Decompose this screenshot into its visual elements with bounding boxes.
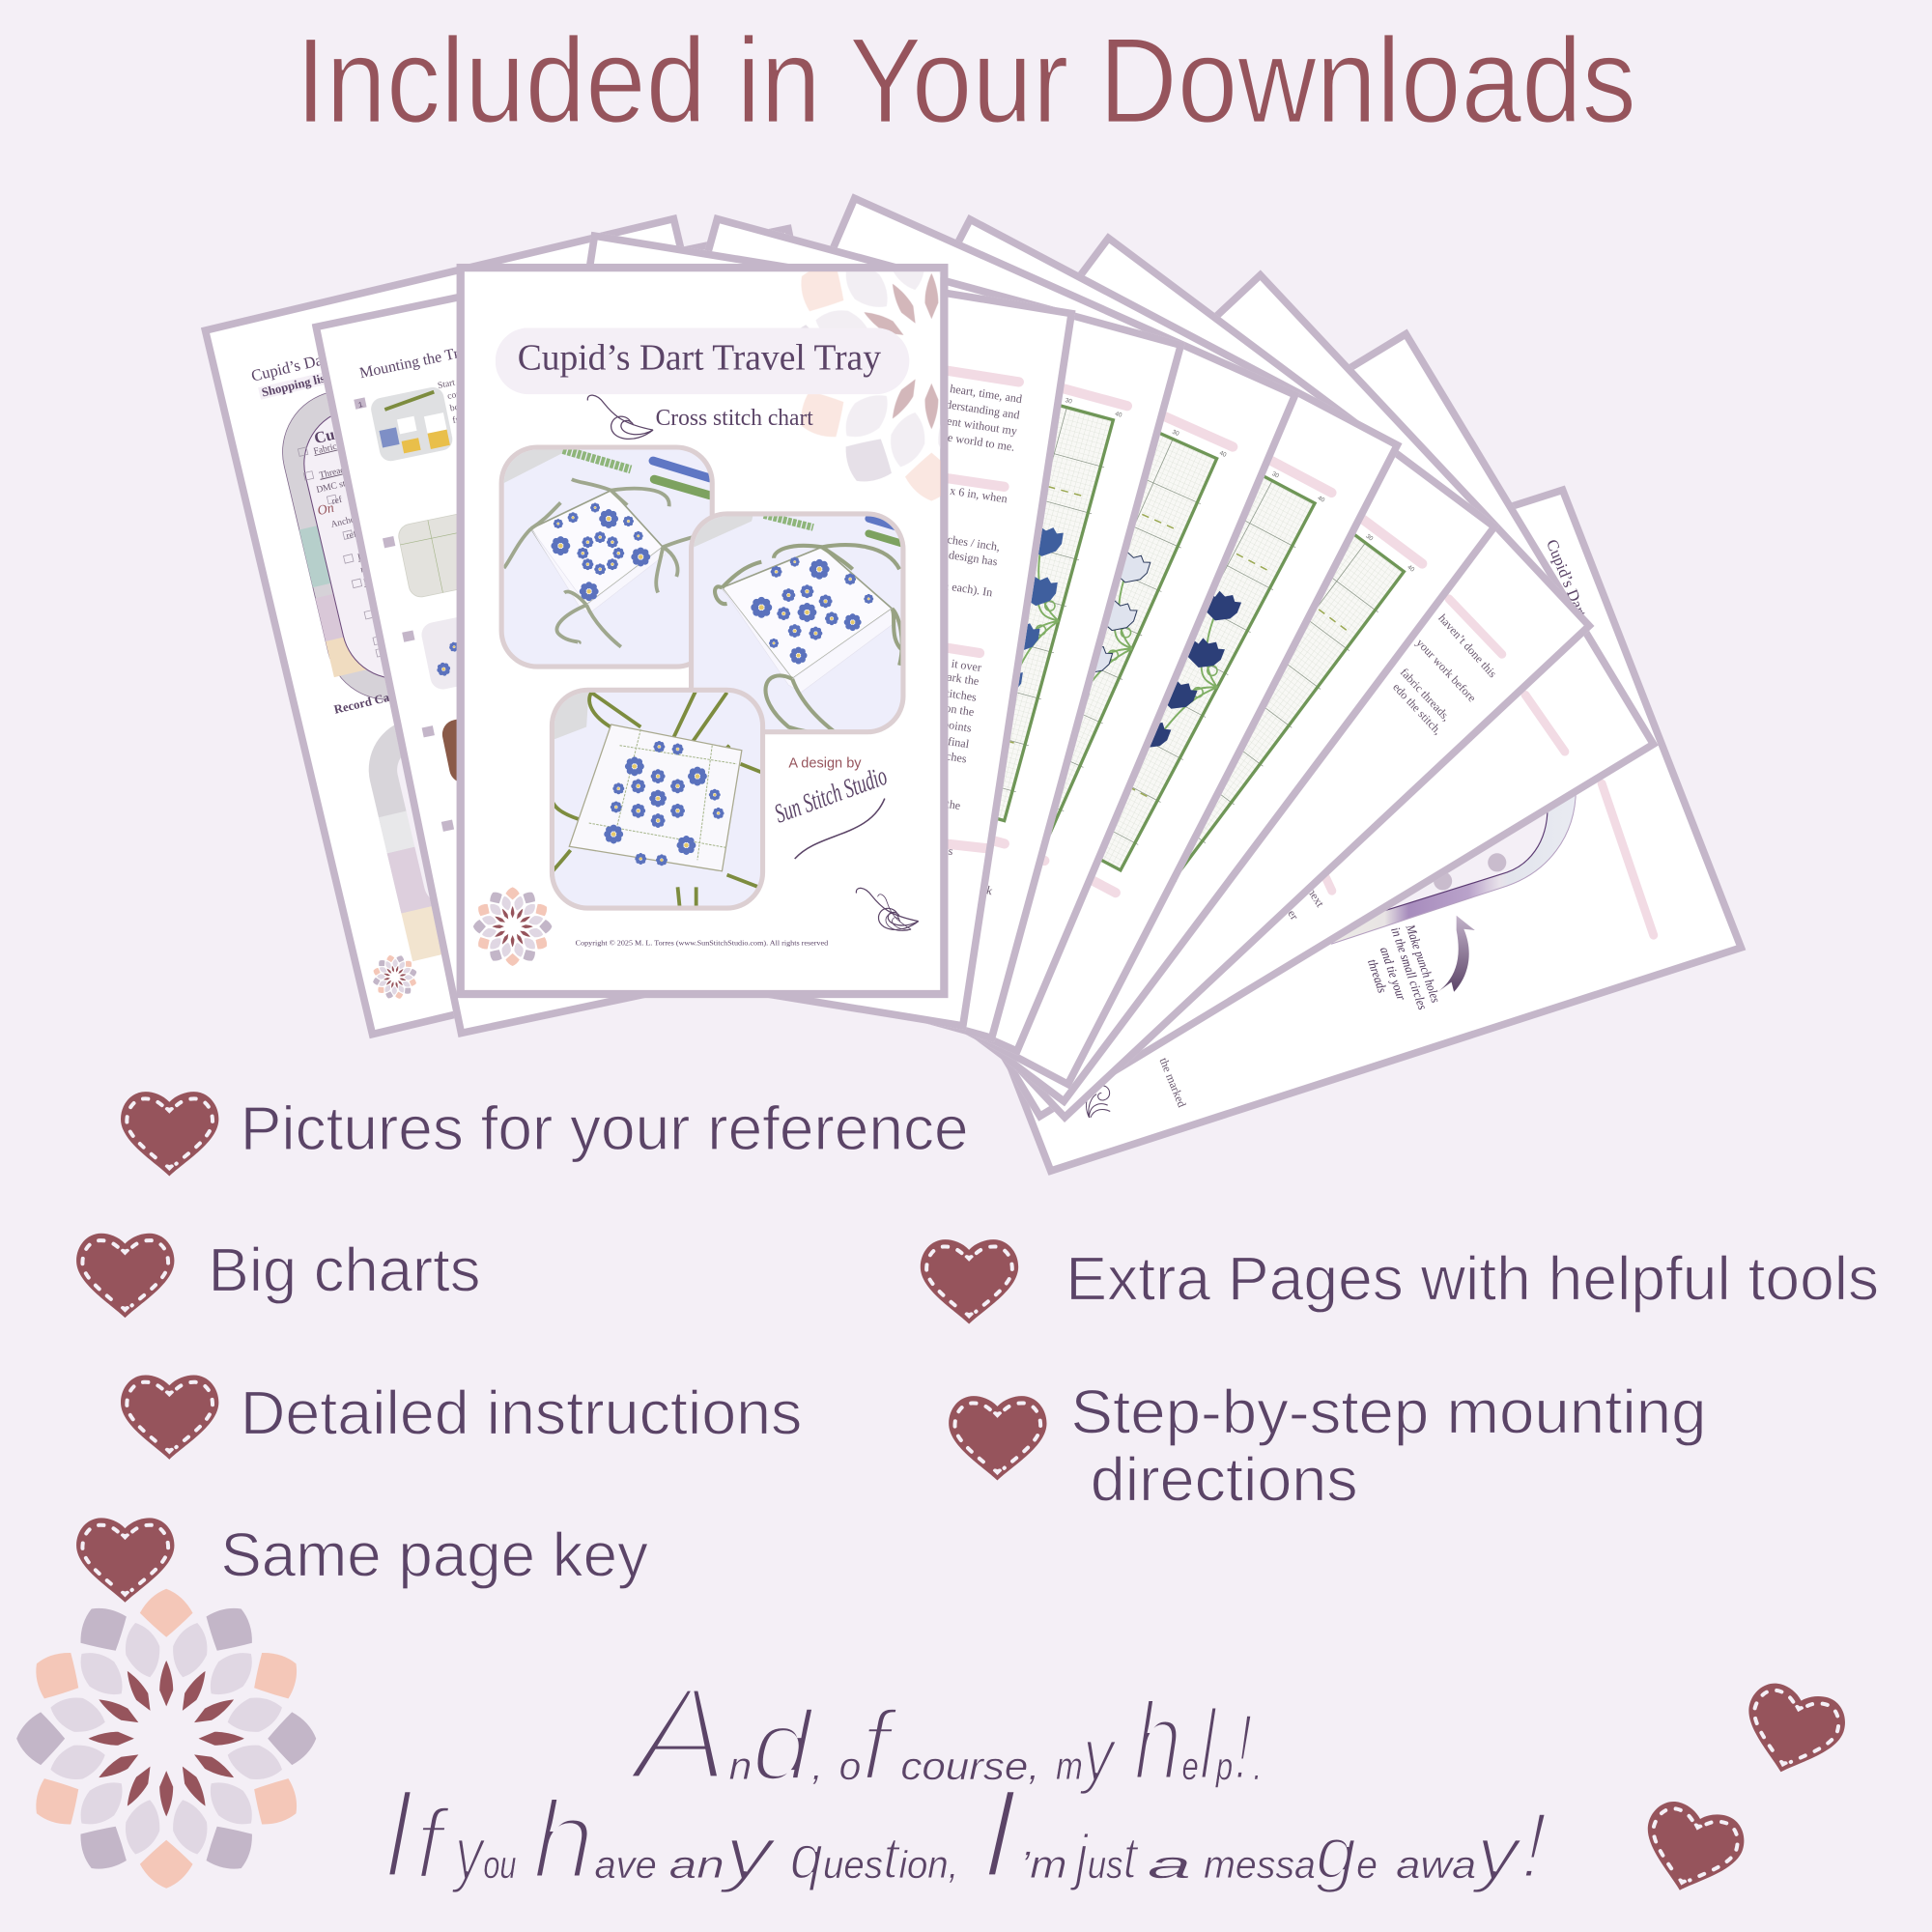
page: back page with punch holes template: Cupid’s Dart: [1543, 537, 1591, 620]
page: mounting the tray: need: [456, 423, 476, 438]
page: instructions p3: fabric threads,: [1398, 666, 1453, 724]
line one: course,: [900, 1746, 1040, 1788]
line two: I’m: [979, 1762, 1067, 1906]
page: shopping list: Anchor: [329, 513, 360, 530]
page: chart part 1: k: [985, 883, 995, 897]
page: shopping list: On: [316, 500, 335, 519]
feature: instructions: Detailed instructions: [241, 1378, 802, 1448]
punch holes note: in the small circles: [1388, 925, 1430, 1011]
page: shopping list: Fabric: [408, 782, 438, 801]
feature: big charts: Big charts: [209, 1236, 480, 1305]
line two: away!: [1396, 1792, 1548, 1898]
title: Included in Your Downloads: [296, 14, 1636, 148]
page: introduction text: stitches: [941, 686, 978, 704]
line one: of: [839, 1689, 899, 1801]
flourish ornament: [587, 395, 653, 439]
page: shopping list: Fusible: [356, 547, 385, 563]
page: mounting the tray: Start: [437, 378, 456, 391]
page: introduction text: ches: [945, 749, 968, 766]
page: shopping list: ref: [345, 528, 358, 542]
page: introduction text: by heart, time, and: [934, 380, 1023, 406]
line two: message: [1204, 1812, 1378, 1894]
page: instructions p3: edo the stitch,: [1390, 680, 1444, 737]
page: introduction text: the world to me.: [938, 429, 1015, 454]
page: shopping list: Cupid’s: [312, 417, 369, 447]
page: shopping list: DMC stranded: [315, 472, 371, 496]
page: introduction text: in each). In: [939, 578, 993, 599]
page: shopping list: Record Card: [332, 688, 403, 717]
page: introduction text: [586, 232, 1076, 1030]
page: introduction text: final: [947, 734, 971, 751]
page: introduction text: h it over: [942, 655, 982, 674]
arrow: [1438, 916, 1475, 992]
page: instructions p2: er: [1285, 907, 1301, 923]
page: introduction text: the: [946, 797, 961, 812]
page: shopping list: Thread: [412, 804, 446, 822]
page: mounting the tray: from: [451, 412, 471, 426]
photo: tray flat top view: [550, 688, 765, 912]
line two: If: [381, 1762, 451, 1906]
page: instructions p3: your work before: [1413, 636, 1479, 704]
page: mounting the tray: compl: [446, 386, 471, 402]
line two: any: [669, 1812, 779, 1894]
page: mounting the tray: [311, 224, 794, 1037]
feature: extra pages: Extra Pages with helpful tools: [1065, 1244, 1879, 1314]
feature: extra pages: [921, 1239, 1879, 1324]
faded mandala decoration: [801, 271, 941, 500]
photo: tray angled left: [499, 444, 715, 669]
page: chart part 1: [705, 214, 1185, 1042]
feature: big charts: [76, 1234, 480, 1318]
feature: mounting directions: [949, 1377, 1707, 1515]
page: introduction text: hark the: [940, 668, 980, 688]
subtitle: Cross stitch chart: [656, 405, 813, 431]
feature: instructions: [121, 1375, 802, 1460]
page: shopping list: Needles: [362, 571, 394, 588]
line one: my: [1056, 1714, 1118, 1796]
line one: And,: [626, 1660, 823, 1808]
designer credit: A design by: [788, 756, 862, 772]
page: mounting the tray: both: [449, 400, 468, 413]
designer credit: [771, 756, 891, 859]
page: shopping list: Project: [429, 871, 463, 891]
feature: page key: Same page key: [220, 1520, 648, 1589]
large mandala logo: [16, 1589, 316, 1889]
closing script message: [381, 1660, 1548, 1906]
decorative heart upper: [1734, 1677, 1852, 1785]
punch hole template shape: [1332, 788, 1576, 944]
page: introduction text: e design has: [940, 547, 999, 568]
page: shopping list: Cupid’s Dart Travel Tray: [249, 330, 411, 385]
page: shopping list: Sharp: [383, 630, 406, 645]
page: shopping list: Shopping list: [260, 370, 331, 400]
page: chart part 2: [831, 193, 1300, 1056]
page: mounting the tray: 1: [357, 400, 363, 410]
line two: you: [451, 1812, 516, 1894]
page: introduction text: s: [948, 844, 954, 858]
page: back page with punch holes template: the marked: [1156, 1056, 1189, 1109]
page: chart part 3: [955, 214, 1403, 1090]
cover title pill: [496, 327, 909, 394]
page: back page with punch holes template: [1008, 485, 1747, 1176]
line two: [381, 1762, 1548, 1906]
page: introduction text: 6 x 6 in, when: [940, 482, 1009, 505]
page: shopping list: Fabric: [312, 441, 338, 457]
feature list: [76, 1092, 1879, 1603]
copyright: Copyright © 2025 M. L. Torres (www.SunStitchStudio.com). All rights reserved: [576, 938, 828, 947]
page: introduction text: titches / inch,: [937, 531, 1001, 554]
page: introduction text: ntent without my: [937, 412, 1018, 438]
punch holes note: threads: [1365, 957, 1390, 995]
page: shopping list: ref: [330, 495, 344, 507]
line two: a: [1148, 1844, 1191, 1887]
punch holes note: [1368, 924, 1437, 1010]
cover title pill: Cupid’s Dart Travel Tray: [518, 338, 881, 379]
line one: help!.: [1133, 1680, 1262, 1804]
decorative heart lower: [1633, 1796, 1750, 1904]
line two: just: [1069, 1822, 1140, 1891]
page: cover: [456, 264, 949, 999]
feature: page key: [76, 1518, 648, 1603]
page: instructions p3: [1014, 270, 1594, 1122]
punch holes note: Make punch holes: [1403, 922, 1443, 1005]
designer credit: Sun Stitch Studio: [771, 761, 891, 830]
small flourish: [1086, 1086, 1110, 1118]
page: mounting the tray: Mounting the Tray: [358, 342, 474, 382]
page: instructions p2: next: [1305, 885, 1327, 910]
fan of document pages: [201, 193, 1746, 1176]
line two: question,: [790, 1822, 958, 1891]
corner ornament: [856, 888, 919, 935]
feature: mounting directions: Step-by-step mounting: [1070, 1377, 1707, 1446]
punch holes note: and tie your: [1378, 945, 1409, 1003]
page: shopping list: [201, 214, 684, 1039]
page: shopping list: Ribbon: [376, 603, 406, 619]
feature: pictures: Pictures for your reference: [241, 1094, 969, 1163]
page: instructions p3: haven’t done this: [1435, 611, 1500, 680]
page: chart part 2: y Dark: [1081, 918, 1117, 944]
page: chart part 4: [976, 233, 1499, 1107]
page: instructions p2: [1001, 328, 1658, 1122]
feature: mounting directions: directions: [1091, 1445, 1358, 1515]
page: introduction text: on the: [945, 701, 975, 719]
photo: tray angled right: [689, 511, 906, 734]
page: introduction text: points: [942, 717, 973, 735]
page: shopping list: Thread: [318, 465, 346, 481]
page: shopping list: recommended: [359, 553, 412, 575]
page: shopping list: White: [385, 640, 410, 656]
line two: have: [532, 1778, 657, 1902]
line one: [626, 1660, 1262, 1808]
cover mandala logo: [473, 887, 552, 966]
page: chart part 2: m: [1070, 931, 1085, 948]
page: introduction text: understanding and: [933, 396, 1020, 422]
